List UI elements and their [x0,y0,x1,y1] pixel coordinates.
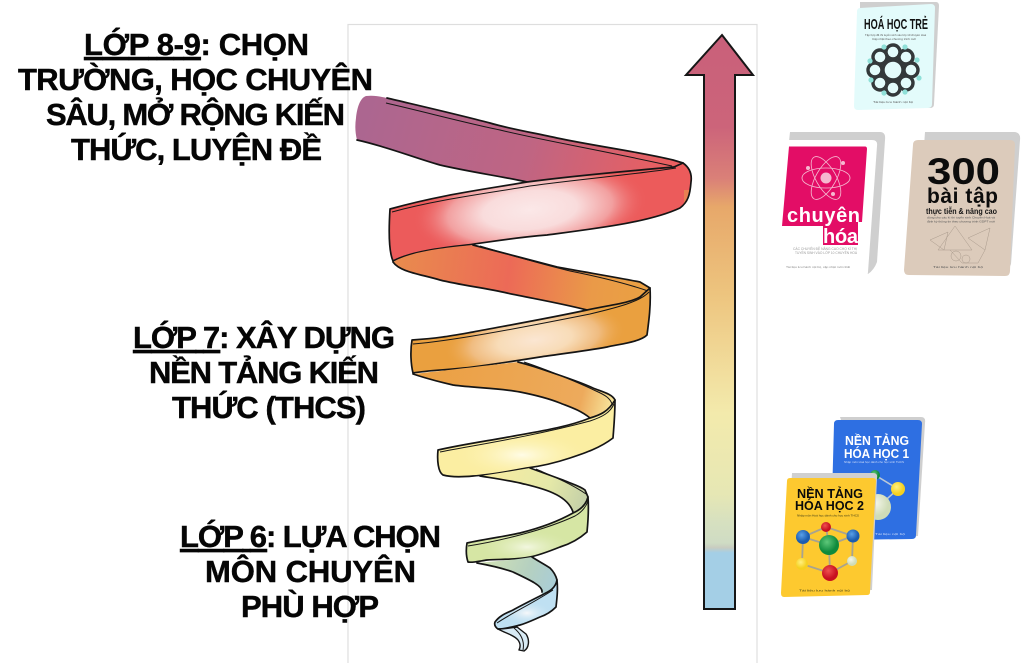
heading: grade 6 [180,518,441,624]
heading: grade 7: LỚP 7: XÂY DỰNG [133,319,395,355]
book: Nền tảng hóa học 1: HÓA HỌC 1 [844,446,909,461]
ribbon segment: grade 7 back band [393,245,650,310]
heading: grade 8-9: TRƯỜNG, HỌC CHUYÊN [18,61,373,97]
arrow: progress upward [686,35,753,609]
book: Nền tảng hóa học 1: Tài liệu nội bộ [875,533,906,536]
ribbon segment: grade 7 front band [410,287,652,374]
heading: grade 8-9: SÂU, MỞ RỘNG KIẾN [46,96,345,132]
book: chuyên hóa: CÁC CHUYÊN ĐỀ NÂNG CAO CHO KÌ THI [793,246,857,251]
book: Nền tảng hóa học 2: Nhập môn Hoá học dành cho học sinh THCS [797,514,859,518]
icon: molecule [796,522,860,581]
book: Nền tảng hóa học 2: NỀN TẢNG [797,486,863,501]
icon: molecule [867,44,922,96]
book: Nền tảng hóa học 2 [781,473,877,597]
heading: grade 8-9: LỚP 8-9: CHỌN [84,26,309,62]
book: 300 bài tập: bài tập [927,185,998,208]
book: 300 bài tập: 300 [927,151,1000,192]
book: chuyên hóa: Tài liệu lưu hành nội bộ, cập nhật mới nhất [786,265,850,269]
ribbon segment: grade 8-9 back band [355,96,683,182]
heading: grade 8-9: THỨC, LUYỆN ĐỀ [71,131,322,167]
book: 300 bài tập: thực tiễn & nâng cao [926,207,997,216]
heading: grade 7: THỨC (THCS) [172,389,366,425]
book: Nền tảng hóa học 1 [831,417,925,540]
ribbon segment: yellow front band [438,400,615,479]
icon: atom [802,152,850,204]
heading: grade 6: PHÙ HỢP [241,588,379,624]
ribbon segment: grade 8-9 front band [388,162,692,262]
book: 300 bài tập: định kỳ thông tin theo chương trình GDPT mới [927,220,995,224]
book: Hoá học trẻ: Cập nhật theo chương trình mới [872,37,916,41]
heading: grade 8-9 [18,26,373,167]
ribbon segment: green front band [466,497,588,565]
panel: chart frame [348,24,757,663]
heading: grade 6: LỚP 6: LỰA CHỌN [180,518,441,554]
heading: grade 7: NỀN TẢNG KIẾN [149,355,379,390]
book: 300 bài tập: Tài liệu lưu hành nội bộ [933,265,984,269]
ribbon segment: tail [498,627,528,651]
book: chuyên hóa: TUYỂN SINH VÀO LỚP 10 CHUYÊN HOÁ [795,250,858,255]
ribbon segment: blue front band [495,580,557,629]
book: Nền tảng hóa học 1: Nhập môn Hoá học dành cho học sinh THCS [844,460,904,464]
spiral ribbon [355,96,692,651]
book: 300 bài tập: dùng cho các kì thi tuyển sinh Chuyên Hoá và [927,216,995,220]
book: chuyên hóa: hóa [823,226,859,248]
book: Hoá học trẻ [854,2,939,110]
icon: geometric pattern [930,226,990,263]
book: Nền tảng hóa học 2: HÓA HỌC 2 [795,498,864,513]
book: Hoá học trẻ: HOÁ HỌC TRẺ [864,16,928,33]
heading: grade 7 [133,319,395,425]
heading: grade 6: MÔN CHUYÊN [205,553,416,589]
ribbon segment: green-blue back band [477,557,557,595]
book: Hoá học trẻ: Tập hợp đề thi tuyển sinh vào lớp 10 chuyên Hoá [865,33,926,37]
book: 300 bài tập [904,132,1020,276]
icon: molecule [865,470,905,520]
book: Nền tảng hóa học 2: Tài liệu lưu hành nội bộ [799,588,851,592]
book: chuyên hóa [768,132,885,277]
ribbon segment: yellow-green back band [480,468,588,513]
book: Nền tảng hóa học 1: NỀN TẢNG [845,433,909,448]
ribbon segment: grade 6-7 back band [413,362,615,418]
book: Hoá học trẻ: Tài liệu lưu hành nội bộ [873,100,913,104]
book: chuyên hóa: chuyên [787,205,860,227]
